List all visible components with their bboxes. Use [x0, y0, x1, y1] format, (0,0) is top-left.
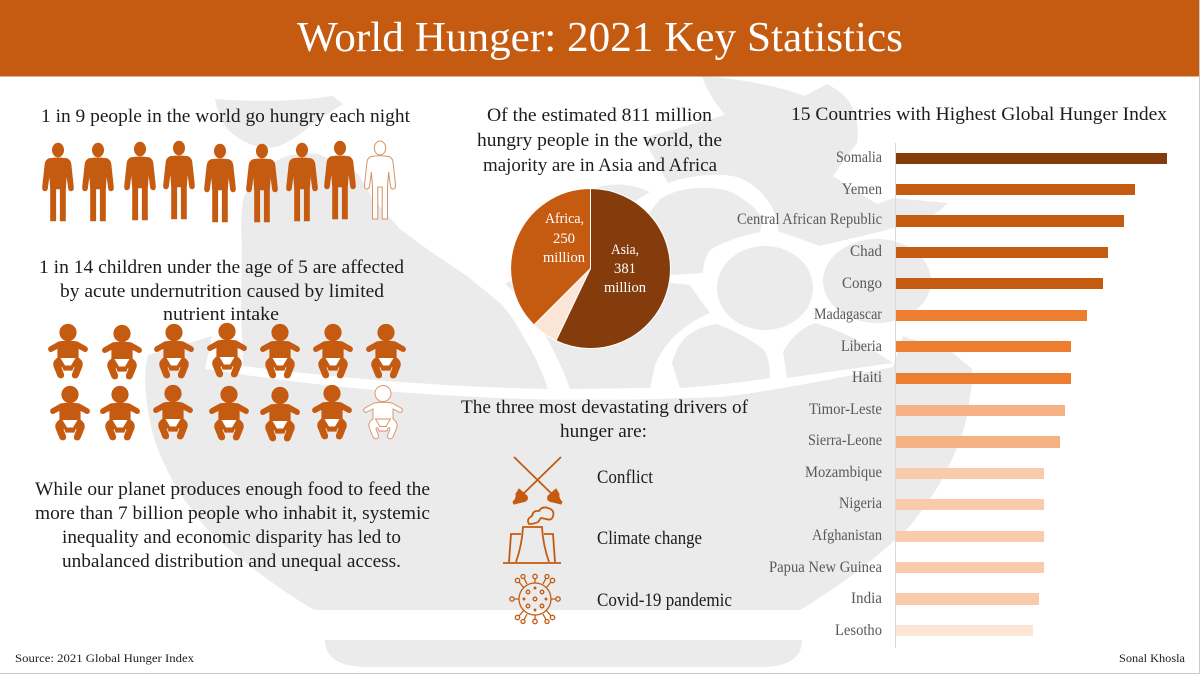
author credit: Sonal Khosla [1119, 651, 1186, 665]
country labels: Madagascar [814, 306, 883, 323]
heading: 1 in 9 people: 1 in 9 people in the world go hungry each night [41, 106, 411, 127]
bars [896, 153, 1167, 636]
country labels: Chad [850, 243, 882, 260]
country labels: Yemen [842, 181, 882, 198]
heading: three drivers of hunger [461, 397, 749, 442]
country labels: Papua New Guinea [769, 559, 882, 576]
pie label: Asia: Asia, [611, 242, 639, 258]
country labels: India [851, 590, 882, 607]
pie chart [511, 188, 670, 348]
text block: planet produces enough food: more than 7 billion people who inhabit it, systemic [35, 503, 430, 524]
title banner [0, 0, 1200, 76]
country labels: Mozambique [805, 464, 882, 481]
country labels: Lesotho [835, 622, 882, 639]
country labels: Haiti [852, 369, 883, 386]
country labels: Nigeria [839, 495, 882, 512]
icon: cooling towers with smoke [503, 507, 561, 563]
country labels: Sierra-Leone [808, 432, 882, 449]
heading: 811 million hungry people: hungry people in the world, the [477, 130, 722, 151]
country labels [737, 149, 883, 639]
text block: planet produces enough food: unbalanced distribution and unequal access. [62, 551, 401, 572]
icon: crossed swords [513, 457, 562, 504]
text block: planet produces enough food: inequality and economic disparity has led to [62, 527, 401, 548]
icon row: nine people, eight filled [42, 141, 396, 222]
pie label: Asia [604, 242, 647, 296]
heading: 811 million hungry people [477, 105, 722, 176]
heading: 1 in 14 children: 1 in 14 children under the age of 5 are affected [39, 257, 405, 278]
bar chart: Global Hunger Index [737, 143, 1167, 648]
country labels: Central African Republic [737, 211, 882, 228]
country labels: Timor-Leste [809, 401, 882, 418]
pie label: Asia: million [604, 280, 647, 296]
heading: 1 in 14 children: by acute undernutrition caused by limited [60, 281, 385, 302]
pie slice: other regions [534, 268, 590, 341]
heading: 1 in 14 children [39, 257, 405, 325]
title: World Hunger: 2021 Key Statistics [297, 15, 903, 61]
heading: three drivers of hunger: hunger are: [560, 421, 647, 442]
heading: 811 million hungry people: Of the estimated 811 million [487, 105, 713, 126]
country labels: Liberia [841, 338, 882, 355]
text block: planet produces enough food: While our planet produces enough food to feed the [35, 479, 430, 500]
pie label: Africa: million [543, 250, 586, 266]
text block: planet produces enough food [35, 479, 430, 572]
pie label: Africa [543, 211, 586, 266]
pie label: Africa: 250 [553, 231, 575, 247]
heading: 811 million hungry people: majority are in Asia and Africa [483, 155, 718, 176]
icon rows: fourteen babies, thirteen filled [49, 324, 405, 441]
icon: virus [510, 574, 560, 624]
pie slice: Asia [556, 188, 670, 348]
country labels: Congo [842, 275, 882, 292]
label: Climate change: Climate change [597, 528, 702, 549]
heading: 1 in 14 children: nutrient intake [163, 304, 279, 325]
label: Conflict: Conflict [597, 467, 654, 488]
pie slice: Africa [511, 188, 590, 325]
source note: Source: 2021 Global Hunger Index [15, 651, 194, 665]
pie label: Asia: 381 [614, 261, 636, 277]
heading: three drivers of hunger: The three most devastating drivers of [461, 397, 749, 418]
label: Covid-19 pandemic: Covid-19 pandemic [597, 590, 732, 611]
country labels: Afghanistan [812, 527, 882, 544]
pie label: Africa: Africa, [545, 211, 584, 227]
heading: 15 countries: 15 Countries with Highest Global Hunger Index [791, 104, 1168, 125]
country labels: Somalia [836, 149, 882, 166]
